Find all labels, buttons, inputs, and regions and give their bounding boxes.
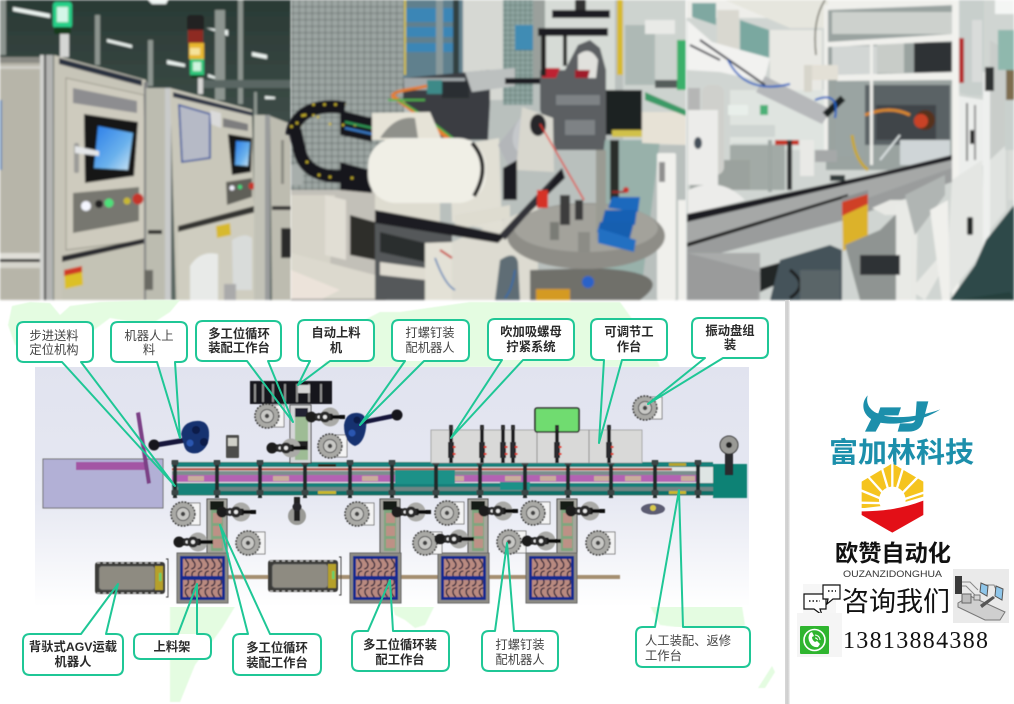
lower workstation group bbox=[95, 497, 665, 603]
callout: adjustable workbench: 可调节工 bbox=[604, 324, 654, 339]
upper left robots and feeder bbox=[148, 381, 402, 463]
callout: screw assembly robot bottom: 配机器人 bbox=[495, 653, 545, 667]
callout: adjustable workbench bbox=[591, 319, 667, 443]
silver spindle bbox=[498, 118, 545, 165]
machine body behind arm bbox=[403, 70, 490, 140]
callout: blow and suction nut tightening system: 拧紧系统 bbox=[506, 339, 556, 354]
contact illustration bbox=[953, 569, 1009, 623]
gripper bbox=[800, 140, 814, 176]
callout: manual assembly and rework bench bbox=[636, 490, 750, 667]
callout: screw assembly robot top: 配机器人 bbox=[405, 341, 455, 355]
right conveyor and shelf bbox=[585, 140, 660, 300]
icon: green phone bbox=[797, 613, 842, 657]
callout: loading rack: 上料架 bbox=[154, 639, 190, 654]
heading: contact us: 咨询我们 bbox=[842, 587, 950, 617]
vertical divider bbox=[785, 300, 790, 704]
floor bbox=[950, 205, 1014, 300]
photo: robot arm at assembly fixture bbox=[291, 0, 686, 300]
brand name: Fujialin Technology: 富加林科技 bbox=[829, 436, 974, 468]
warning sign bbox=[842, 192, 868, 251]
callout: screw assembly robot top bbox=[360, 320, 469, 425]
callout: vibrating bowl assembly bbox=[648, 318, 768, 404]
callout: blow and suction nut tightening system bbox=[451, 319, 574, 438]
callout: screw assembly robot bottom: 打螺钉装 bbox=[495, 638, 545, 652]
upper workstation group bbox=[431, 396, 738, 475]
casting and press bbox=[540, 40, 606, 150]
callout: multi-station workbench bottom centre: 配工作台 bbox=[375, 652, 425, 667]
callout: multi-station circulating workbench top: 多工位循环 bbox=[208, 326, 270, 341]
brand name: Ouzan Automation: 欧赞自动化 bbox=[835, 540, 951, 566]
logo: FJ emblem bbox=[863, 395, 940, 432]
panel: company branding and contact bbox=[797, 395, 1009, 657]
callout: robot loading: 料 bbox=[143, 343, 155, 357]
conveyor bbox=[687, 155, 952, 248]
callout: adjustable workbench: 作台 bbox=[617, 339, 641, 354]
right cabinet bbox=[952, 0, 984, 96]
green signal tower bbox=[60, 33, 69, 57]
callout: piggyback AGV robot: 背驮式AGV运载 bbox=[29, 639, 117, 654]
callout: vibrating bowl assembly: 振动盘组 bbox=[705, 323, 755, 338]
third cabinet bbox=[254, 115, 265, 300]
diagram background map bbox=[8, 300, 775, 702]
callout: multi-station workbench bottom left: 多工位循环 bbox=[246, 640, 308, 655]
main conveyor bbox=[172, 460, 747, 498]
callout: piggyback AGV robot bbox=[23, 584, 123, 675]
icon: chat bubbles bbox=[803, 584, 840, 615]
callout: manual assembly and rework bench: 工作台 bbox=[645, 648, 682, 663]
photo: control cabinets with signal towers bbox=[0, 0, 291, 300]
rotary table bbox=[530, 268, 653, 300]
callout: stepping feed positioning mechanism: 步进送料 bbox=[29, 328, 79, 343]
callout: multi-station workbench bottom centre bbox=[352, 580, 449, 671]
table plate bbox=[375, 168, 565, 243]
glass enclosure bbox=[826, 5, 956, 170]
robot arm bbox=[687, 20, 770, 82]
infeed pallet area bbox=[43, 412, 163, 508]
callout: automatic feeder bbox=[298, 320, 374, 385]
callout: vibrating bowl assembly: 装 bbox=[724, 337, 736, 352]
callout: loading rack bbox=[134, 584, 211, 659]
callout: multi-station workbench bottom left: 装配工作台 bbox=[246, 655, 308, 670]
white robot arm bbox=[372, 112, 442, 140]
callout: multi-station workbench bottom centre: 多工位循环装 bbox=[363, 637, 437, 652]
under conveyor bbox=[770, 245, 842, 300]
blue boxes bbox=[608, 197, 640, 212]
callout: stepping feed positioning mechanism bbox=[17, 322, 175, 486]
callout: multi-station circulating workbench top bbox=[196, 321, 293, 422]
red yellow green signal tower bbox=[198, 78, 203, 94]
callout: manual assembly and rework bench: 人工装配、返修 bbox=[645, 633, 731, 648]
callout: multi-station workbench bottom left bbox=[220, 525, 321, 675]
phone number: 13813884388 bbox=[843, 628, 988, 654]
brand pinyin: OUZANZIDONGHUA bbox=[843, 569, 943, 580]
callout: screw assembly robot bottom bbox=[482, 543, 558, 671]
second cabinet bbox=[165, 88, 171, 300]
callout: stepping feed positioning mechanism: 定位机构 bbox=[29, 342, 79, 357]
lower frame bbox=[291, 190, 375, 300]
callout: blow and suction nut tightening system: 吹加吸螺母 bbox=[500, 324, 562, 339]
callout: piggyback AGV robot: 机器人 bbox=[55, 654, 92, 669]
cable chain bbox=[292, 107, 345, 135]
callout: robot loading bbox=[111, 322, 187, 438]
panel: assembly line layout plan bbox=[17, 318, 768, 675]
callout: automatic feeder: 自动上料 bbox=[311, 325, 361, 340]
callout: automatic feeder: 机 bbox=[330, 340, 343, 355]
callout: screw assembly robot top: 打螺钉装 bbox=[405, 326, 455, 340]
logo: yellow sun and red hexagon bbox=[859, 462, 927, 533]
main door bbox=[54, 55, 150, 300]
callout: robot loading: 机器人上 bbox=[124, 329, 174, 343]
photo: robot and conveyor line bbox=[686, 0, 1014, 300]
callout: multi-station circulating workbench top: 装配工作台 bbox=[208, 340, 270, 355]
left cabinet bbox=[0, 60, 44, 300]
